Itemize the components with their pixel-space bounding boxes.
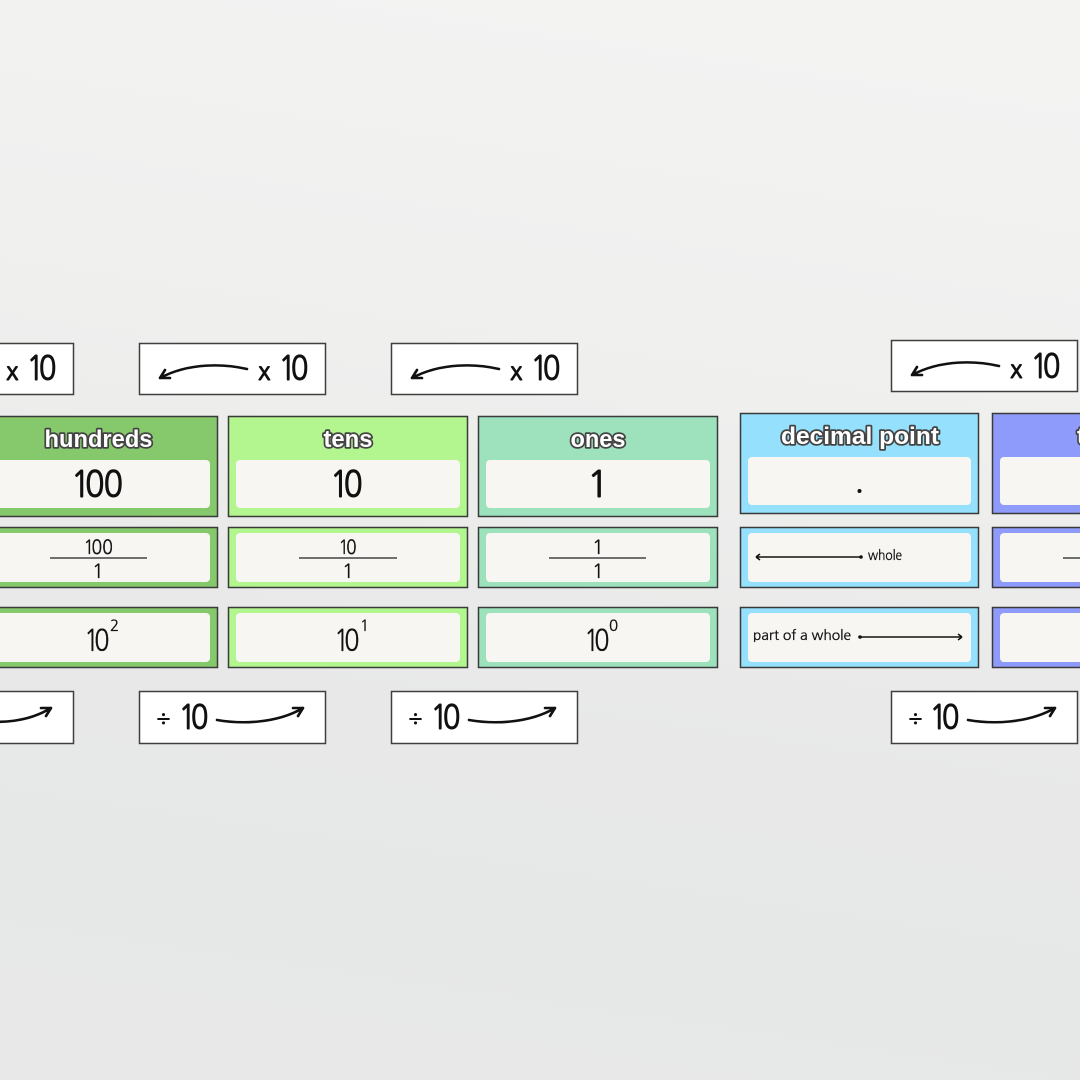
card: ones fraction: 1 [592,561,604,581]
arrow card: x 10 tenths to ones [892,340,1078,392]
column: tenths [992,414,1080,668]
card: part of a whole arrow [740,608,978,668]
arrow card: divide 10 hundreds to tens: ÷ [157,709,170,729]
arrow card: divide 10 tens to ones [392,692,578,744]
card: tenths fraction [992,528,1080,588]
column: tens [228,416,468,668]
card: decimal point heading and dot: decimal point [781,423,939,450]
card: ones exponent: 10 [584,625,609,655]
card: hundreds fraction: 100 [84,537,113,557]
arrow card: x 10 partial left: x [6,359,19,384]
card: ones heading and number [478,416,718,516]
card: ones heading and number: ones [570,426,626,453]
arrow card: divide 10 tens to ones: ÷ [409,709,422,729]
card: tens fraction [228,528,468,588]
card: hundreds exponent [0,608,218,668]
card: hundreds fraction [0,528,218,588]
arrow card: x 10 tenths to ones: 10 [1030,350,1060,383]
arrow card: x 10 tenths to ones: x [1010,357,1023,382]
card: tens fraction: 10 [338,537,357,557]
card: ones fraction: 1 [592,537,604,557]
card: hundreds exponent: 2 [110,619,119,634]
card: tens exponent [228,608,468,668]
arrow card: divide 10 tens to ones: 10 [430,701,460,734]
arrow card: x 10 hundreds to thousands [140,344,326,394]
column: decimal point [740,414,978,668]
card: tens exponent: 1 [360,619,369,634]
arrow card: divide 10 ones to tenths: ÷ [909,709,922,729]
card: decimal point heading and dot [740,414,978,514]
card: ones heading and number: 1 [587,467,609,503]
card: hundreds fraction: 1 [92,561,104,581]
card: hundreds exponent: 10 [84,625,109,655]
column: hundreds [0,416,218,668]
card: ones exponent [478,608,718,668]
arrow card: x 10 tens to hundreds [392,344,578,394]
column: ones [478,416,718,668]
arrow card: x 10 partial left: 10 [26,352,56,385]
arrow card: divide 10 ones to tenths: 10 [930,701,959,734]
card: ones exponent: 0 [609,619,618,634]
card: tens heading and number [228,416,468,516]
card: tenths exponent [992,608,1080,668]
card: hundreds heading and number: hundreds [44,426,152,453]
arrow card: divide 10 hundreds to tens [140,692,326,744]
card: part of a whole arrow: part of a whole [753,629,851,642]
arrow card: x 10 hundreds to thousands: 10 [278,352,308,385]
card: hundreds heading and number [0,416,218,516]
card: tens heading and number: tens [324,426,372,453]
arrow card: x 10 tens to hundreds: x [510,359,523,384]
card: tenths heading [992,414,1080,514]
card: tens heading and number: 10 [330,466,363,502]
card: hundreds heading and number: 100 [71,466,123,502]
card: ones fraction [478,528,718,588]
arrow card: divide 10 ones to tenths [892,692,1078,744]
arrow card: divide 10 partial left [0,692,74,744]
card: tens exponent: 10 [334,625,359,655]
arrow card: divide 10 hundreds to tens: 10 [178,701,208,734]
card: whole arrow [740,528,978,588]
arrow card: x 10 hundreds to thousands: x [258,359,271,384]
arrow card: x 10 tens to hundreds: 10 [530,352,560,385]
card: whole arrow: whole [868,549,902,562]
arrow card: x 10 partial left [0,344,74,394]
card: tens fraction: 1 [342,561,354,581]
